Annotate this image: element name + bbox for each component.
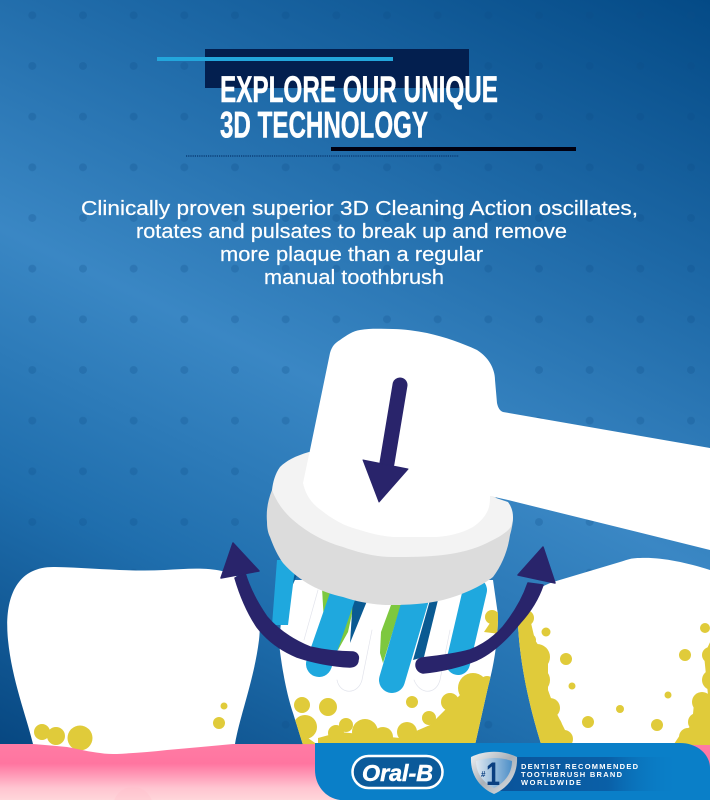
icon: #1 shield	[471, 752, 517, 794]
description text: rotates and pulsates to break up and remove	[136, 221, 567, 243]
description text: more plaque than a regular	[220, 244, 483, 266]
claim text: DENTIST RECOMMENDED	[521, 762, 639, 771]
left tooth	[7, 567, 260, 760]
middle tooth	[279, 580, 505, 750]
plaque	[510, 610, 710, 750]
Oral-B logo: Oral-B	[362, 760, 433, 786]
handle and neck	[303, 329, 710, 550]
down arrow	[363, 385, 408, 502]
icon: #1 shield: 1	[486, 756, 500, 792]
claim text	[521, 762, 639, 787]
title block	[157, 49, 576, 156]
claim text: WORLDWIDE	[521, 778, 581, 787]
Oral-B logo	[352, 756, 442, 788]
toothbrush	[267, 329, 710, 605]
description text	[81, 198, 638, 289]
footer bar	[315, 743, 710, 800]
gums	[0, 744, 710, 800]
description text: Clinically proven superior 3D Cleaning Action oscillates,	[81, 198, 638, 220]
right tooth	[510, 558, 710, 750]
right motion arrow	[416, 547, 555, 673]
description text: manual toothbrush	[264, 267, 444, 289]
white bristle outlines	[289, 590, 450, 691]
title block: EXPLORE OUR UNIQUE	[220, 69, 498, 110]
brush head mid	[272, 452, 513, 557]
plaque	[294, 610, 498, 744]
title block: 3D TECHNOLOGY	[220, 104, 428, 146]
bristles	[272, 560, 475, 691]
claim text: TOOTHBRUSH BRAND	[521, 770, 623, 779]
brush head rim	[267, 480, 513, 605]
left motion arrow	[221, 543, 358, 667]
icon: #1 shield: #	[481, 770, 486, 779]
